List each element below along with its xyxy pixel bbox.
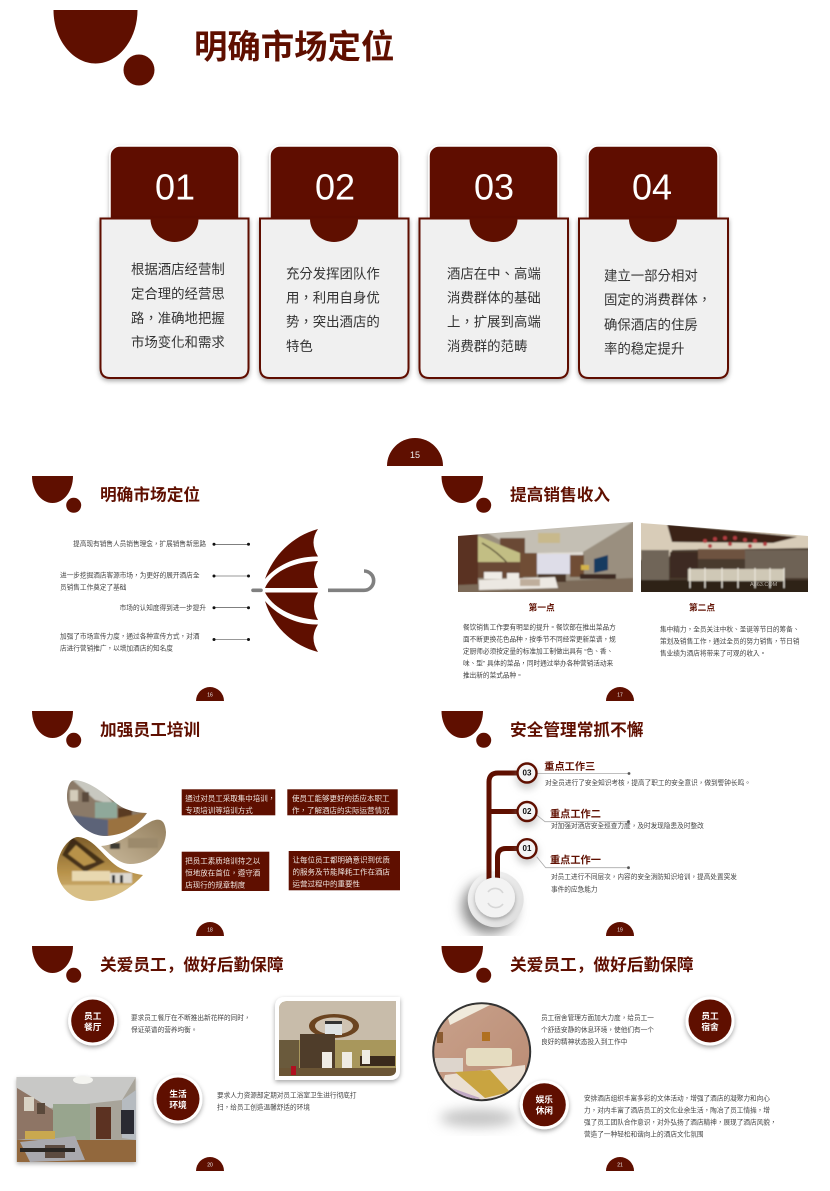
photo: dining room — [275, 997, 400, 1080]
item 01 — [516, 839, 737, 894]
photo drop 2 — [101, 820, 166, 864]
page number 15: 15 — [410, 450, 420, 460]
icon: header circles — [54, 10, 154, 86]
badge: canteen: 餐厅 — [84, 1021, 102, 1032]
item 02: 02 — [523, 807, 532, 816]
text block: recreation — [584, 1094, 777, 1138]
badge: dormitory — [686, 996, 734, 1046]
heading: 加强员工培训 — [100, 720, 200, 740]
text list: 加强了市场宣传力度，通过各种宣传方式，对酒 — [60, 632, 200, 640]
heading: 安全管理常抓不懈 — [510, 720, 644, 740]
item 02: 重点工作二 — [550, 808, 601, 820]
text list: 员销售工作奠定了基础 — [60, 582, 127, 592]
card 04: 率的稳定提升 — [604, 340, 684, 356]
label box 1: 专项培训等培训方式 — [185, 805, 253, 815]
icon: header circles — [442, 946, 491, 983]
badge: living environment — [154, 1074, 202, 1124]
icon: recycle arrows — [488, 888, 503, 908]
page number 18: 18 — [207, 928, 213, 934]
text block: recreation: 安排酒店组织丰富多彩的文体活动，增强了酒店的凝聚力和向心 — [584, 1094, 770, 1102]
card 04: 固定的消费群体， — [604, 292, 711, 308]
item 01: 重点工作一 — [550, 854, 601, 866]
text block: point one: 推出新的菜式品种。 — [463, 670, 523, 680]
base disk inner — [475, 878, 515, 918]
item 03: 重点工作三 — [544, 760, 595, 773]
text block: point one: 面不断更换花色品种，按季节不同经常更新菜谱，规 — [463, 634, 616, 643]
photo: banquet hall — [639, 521, 810, 594]
page number 21: 21 — [617, 1162, 623, 1168]
card 01: 01 — [155, 166, 195, 208]
item 02 — [516, 802, 704, 830]
heading: 关爱员工，做好后勤保障 — [510, 954, 694, 974]
text block: point one — [463, 622, 616, 680]
card 02 — [260, 146, 408, 378]
card 03: 03 — [474, 166, 514, 208]
item 03: 03 — [523, 768, 532, 778]
item 01: 对员工进行不同层次，内容的安全消防知识培训，提高处置突发 — [551, 872, 737, 881]
label box 2 — [287, 789, 398, 815]
text list: 店进行营销推广，以增加酒店的知名度 — [60, 644, 173, 652]
page number 18 — [196, 922, 224, 936]
panel: slide 15 market positioning — [54, 10, 728, 466]
text block: canteen — [131, 1013, 251, 1034]
card 03: 消费群的范畴 — [447, 339, 527, 354]
label box 4 — [289, 851, 400, 890]
card 02: 02 — [315, 166, 355, 208]
label box 4: 让每位员工都明确意识到优质 — [292, 854, 390, 864]
page number 17 — [606, 687, 634, 701]
item 01: 事件的应急能力 — [551, 884, 598, 894]
text block: point two: 策划及销售工作，通过全员的努力销售，节日销 — [660, 636, 800, 646]
item 02: 对加强对酒店安全巡查力度，及时发现隐患及时整改 — [551, 821, 704, 830]
text list: 市场的认知度得到进一步提升 — [120, 603, 206, 612]
icon: umbrella — [253, 529, 374, 652]
text block: point two: 售业绩为酒店将带来了可观的收入。 — [660, 648, 766, 658]
card 01: 路，准确地把握 — [131, 311, 225, 326]
label box 1 — [182, 789, 275, 815]
panel: slide 18 training — [32, 711, 400, 936]
card 01 — [100, 146, 248, 378]
text block: point one: 餐饮销售工作要有明显的提升。餐饮部在推出菜品方 — [463, 622, 616, 631]
text block: canteen: 保证菜谱的营养均衡。 — [131, 1025, 197, 1034]
subheading: point one: 第一点 — [529, 602, 555, 613]
badge: living environment: 环境 — [169, 1099, 187, 1110]
badge: recreation: 休闲 — [536, 1105, 553, 1116]
panel: slide 17 sales — [442, 476, 810, 701]
card 04: 04 — [632, 166, 672, 208]
page number 21 — [606, 1157, 634, 1171]
text block: canteen: 要求员工餐厅在不断推出新花样的同时， — [131, 1013, 251, 1022]
label box 2: 使员工能够更好的适应本职工 — [292, 793, 390, 803]
title: 明确市场定位 — [194, 30, 394, 66]
subheading: point two: 第二点 — [689, 602, 715, 613]
label box 3: 恒地放在首位，遵守酒 — [185, 868, 261, 878]
card 01: 市场变化和需求 — [131, 334, 225, 350]
heading: 提高销售收入 — [510, 484, 610, 504]
icon: header circles — [442, 711, 491, 748]
icon: header circles — [32, 946, 81, 983]
text block: dormitory: 个舒适安静的休息环境，使他们有一个 — [541, 1025, 654, 1034]
badge: living environment: 生活 — [169, 1088, 187, 1099]
page number 17: 17 — [617, 692, 623, 698]
item 01: 01 — [523, 844, 532, 853]
panel: slide 16 umbrella — [32, 476, 374, 701]
photo: bedroom — [17, 1076, 136, 1162]
card 01: 定合理的经营思 — [131, 286, 225, 302]
text list: 进一步挖掘酒店客源市场，为更好的展开酒店全 — [60, 570, 200, 580]
card 04: 建立一部分相对 — [604, 268, 698, 284]
label box 3: 把员工素质培训持之以 — [185, 856, 261, 866]
text block: dormitory: 员工宿舍管理方面加大力度，给员工一 — [541, 1013, 654, 1022]
card 01: 根据酒店经营制 — [131, 262, 225, 277]
badge: recreation: 娱乐 — [536, 1094, 553, 1105]
label box 4: 的服务及节能降耗工作在酒店 — [292, 866, 390, 876]
text block: point one: 味、型” 具体的菜品，同时通过举办各种营销活动来 — [463, 658, 614, 668]
badge: canteen: 员工 — [84, 1011, 102, 1021]
page number 20 — [196, 1157, 224, 1171]
page number 16 — [196, 687, 224, 701]
card 03: 酒店在中、高端 — [447, 266, 541, 282]
text block: recreation: 力，对内丰富了酒店员工的文化业余生活，陶冶了员工情操，增 — [584, 1106, 770, 1114]
label box 3 — [182, 852, 269, 891]
page number 20: 20 — [207, 1162, 213, 1168]
icon: header circles — [442, 476, 491, 513]
text block: dormitory: 良好的精神状态投入到工作中 — [541, 1037, 627, 1046]
page number 19 — [606, 922, 634, 936]
text block: living environment: 扫，给员工创造温馨舒适的环境 — [217, 1102, 310, 1112]
photo drop 3 — [57, 837, 143, 901]
page number 19: 19 — [617, 928, 623, 934]
badge: canteen — [68, 996, 117, 1046]
card 03 — [420, 146, 568, 378]
badge: recreation — [520, 1080, 569, 1129]
card 03: 消费群体的基础 — [447, 290, 541, 306]
text block: recreation: 强了员工团队合作意识，对外弘扬了酒店精神，展现了酒店风貌， — [584, 1118, 777, 1126]
badge: dormitory: 宿舍 — [701, 1021, 719, 1032]
heading: 明确市场定位 — [100, 484, 200, 504]
base disk outer — [462, 871, 524, 934]
text block: living environment — [217, 1090, 357, 1112]
label box 1: 通过对员工采取集中培训， — [185, 793, 275, 803]
item 03 — [516, 760, 751, 789]
text block: point two: 集中精力，全员关注中秋、圣诞等节日的筹备、 — [660, 624, 799, 634]
card 02: 特色 — [286, 338, 313, 354]
text block: dormitory — [541, 1013, 654, 1046]
connector lines — [212, 543, 250, 641]
icon: header circles — [32, 711, 81, 748]
card 02: 势，突出酒店的 — [286, 314, 380, 330]
photo shadow — [440, 1109, 516, 1127]
card 03: 上，扩展到高端 — [447, 314, 541, 330]
card 04: 确保酒店的住房 — [604, 318, 698, 332]
text list: 提高现有销售人员销售理念，扩展销售新思路 — [73, 539, 206, 548]
page number 16: 16 — [207, 692, 213, 698]
photo: round dormitory — [430, 1000, 534, 1104]
text block: living environment: 要求人力资源部定期对员工浴室卫生进行彻底打 — [217, 1090, 357, 1100]
label box 2: 作，了解酒店的实际运营情况 — [292, 805, 390, 815]
icon: header circles — [32, 476, 81, 513]
card 02: 用，利用自身优 — [286, 290, 380, 306]
text block: point two — [660, 624, 800, 658]
card 02: 充分发挥团队作 — [286, 266, 380, 282]
panel: slide 20 staff care — [17, 946, 400, 1171]
text list — [60, 539, 206, 652]
panel: slide 19 safety — [442, 711, 751, 936]
photo: guest room — [456, 520, 635, 594]
label box 4: 运营过程中的重要性 — [292, 878, 360, 888]
badge: dormitory: 员工 — [701, 1011, 719, 1021]
photo: banquet hall: A863.COM — [750, 582, 778, 588]
panel: slide 21 staff care — [430, 946, 777, 1171]
photo drop 1 — [67, 780, 147, 836]
item 03: 对全员进行了安全知识考核，提高了职工的安全意识，做到警钟长鸣。 — [545, 778, 751, 787]
timeline stem — [489, 773, 520, 880]
card 04 — [579, 146, 728, 378]
label box 3: 店现行的规章制度 — [185, 880, 246, 890]
heading: 关爱员工，做好后勤保障 — [100, 954, 284, 974]
page number 15 — [387, 438, 443, 466]
text block: recreation: 营造了一种轻松和谐向上的酒店文化氛围 — [584, 1130, 704, 1138]
text block: point one: 定厨师必须按定量的标准加工制做出具有 “色、香、 — [463, 646, 613, 656]
